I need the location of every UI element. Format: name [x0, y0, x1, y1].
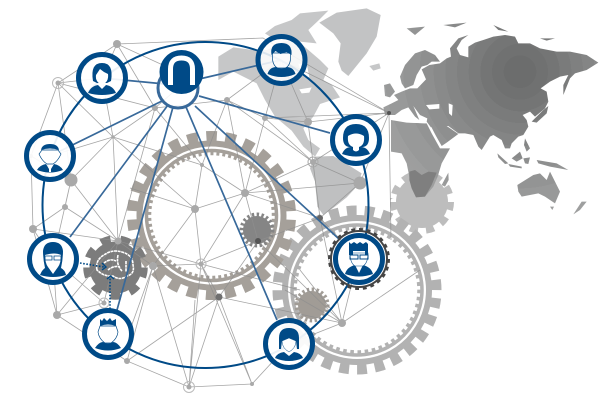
gear: large gear left — [127, 131, 296, 300]
madagascar — [442, 173, 449, 187]
world map: old world — [383, 23, 598, 214]
north america — [218, 40, 340, 157]
sumatra — [497, 153, 508, 164]
dotted arrows to brain — [80, 263, 114, 309]
java and islands — [508, 157, 530, 168]
avatar: man with dark hair — [258, 36, 305, 84]
iceland — [369, 63, 381, 71]
avatar: man with spiky hair — [84, 310, 132, 358]
greenland — [319, 8, 381, 76]
new guinea — [537, 160, 568, 170]
africa — [391, 120, 450, 197]
avatar: headset person — [160, 50, 204, 94]
gear: large gear right — [268, 201, 446, 379]
philippines — [524, 138, 530, 152]
ring connecting people — [42, 42, 368, 368]
icon: brain — [97, 251, 133, 278]
avatar: man in suit — [26, 132, 74, 180]
eurasia — [383, 35, 598, 150]
arctic islands — [265, 11, 328, 43]
arctic russia islands — [407, 23, 555, 41]
network nodes — [29, 40, 391, 392]
gear: light gear over southern africa — [394, 174, 450, 230]
borneo — [512, 152, 523, 162]
australia — [517, 172, 560, 203]
south america — [310, 156, 362, 215]
avatar: man with glasses and gear — [336, 236, 382, 282]
network lines — [31, 38, 420, 387]
red sea — [431, 127, 441, 147]
avatar: woman with bob hair — [266, 320, 312, 368]
british isles — [384, 83, 395, 97]
gear: brain gear — [87, 239, 144, 296]
hudson bay and great lakes — [298, 63, 312, 93]
scandinavia — [400, 50, 440, 88]
tasmania — [550, 207, 554, 210]
gear: small dark gear — [242, 214, 272, 246]
world map: americas — [218, 8, 381, 215]
hub ring — [158, 68, 198, 108]
seas — [388, 103, 453, 123]
new zealand — [573, 202, 587, 214]
avatar: woman with long hair and glasses — [30, 236, 76, 282]
gear: small gear inside right gear — [296, 290, 328, 320]
gear: dark gear around avatar — [330, 230, 388, 288]
japan — [532, 106, 548, 123]
avatar: woman short hair — [78, 54, 126, 102]
blue spokes from hub — [50, 60, 340, 320]
southern africa — [409, 170, 437, 197]
avatar: person with round hair — [332, 116, 380, 164]
